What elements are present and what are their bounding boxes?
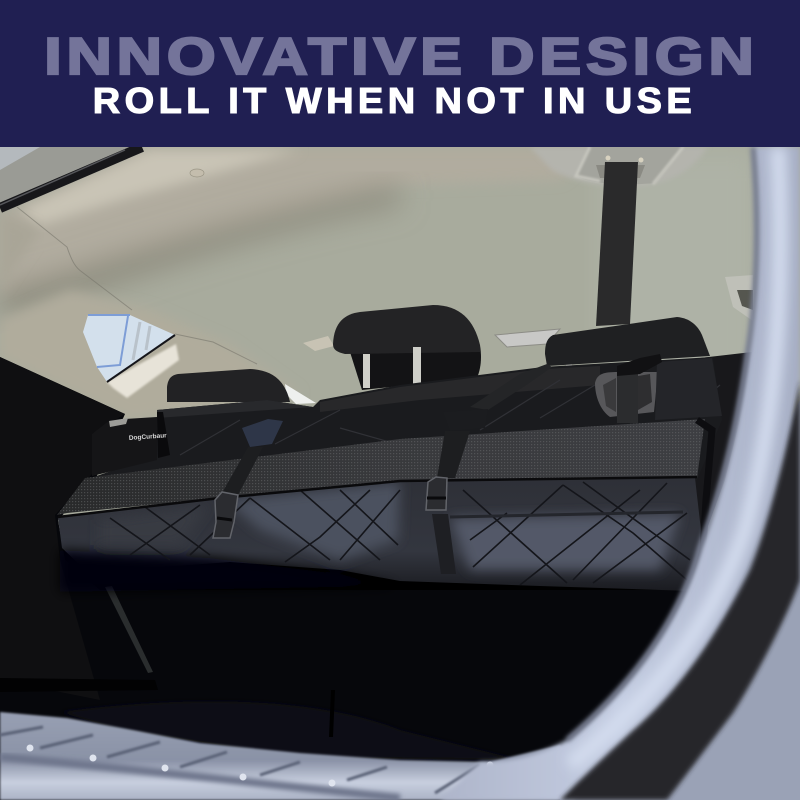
rear window [83,315,179,398]
upper folded cover section [85,357,722,480]
seat belt strap [596,162,638,326]
brand label: DogCurbaur [129,432,167,442]
subheading: roll it when not in use: ROLL IT WHEN NOT IN USE [93,80,696,121]
right headrest [545,317,710,366]
quilt stitch lines [110,482,690,585]
band highlight [570,147,780,765]
quilted body [58,478,703,591]
upper right quilt corner [655,358,722,420]
light door band [440,147,800,800]
grab handle right [495,329,560,347]
left headrest [167,369,290,402]
trunk sill [0,712,600,800]
left strap with buckle [213,419,283,538]
far right cover end behind pillar [690,352,752,560]
outer body panel [560,400,800,800]
leather patch [595,372,658,417]
grab handle left [303,336,334,351]
headrest posts [238,347,572,406]
side vent [725,275,753,321]
ceiling bump [190,169,204,177]
center headrest [333,305,481,390]
mesh band [57,419,705,515]
title banner [0,0,800,147]
dark seal band [560,380,800,800]
band inner edge [567,147,757,740]
right strap with buckle [426,364,552,574]
quilt highlights [60,482,680,592]
trunk interior dark [0,357,720,800]
main roll [57,419,712,592]
heading: innovative design: INNOVATIVE DESIGN [44,28,759,86]
headliner ceiling [0,147,800,547]
window streak behind headrest [285,384,316,404]
overhead console [530,147,708,186]
top-left window pillar [0,147,142,208]
door frame right side [440,147,800,800]
headliner crease line [17,207,257,364]
upper right strap [617,354,662,423]
